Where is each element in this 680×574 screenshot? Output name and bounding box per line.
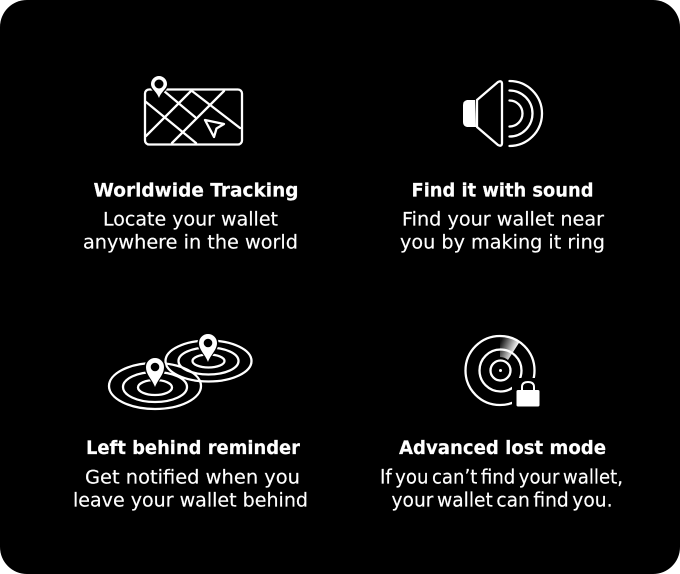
- text: anywhere in the world: anywhere in the world: [83, 232, 298, 254]
- icon: radar disc with padlock: [466, 336, 543, 410]
- text: If you can't find your wallet,: If you can’t find your wallet,: [380, 466, 623, 488]
- text: Find your wallet near: Find your wallet near: [402, 210, 604, 230]
- heading: Worldwide Tracking: Worldwide Tracking: [94, 180, 298, 202]
- icon: map with pin and arrow: [145, 74, 242, 144]
- text: leave your wallet behind: leave your wallet behind: [73, 490, 308, 512]
- heading: Find it with sound: Find it with sound: [412, 180, 594, 202]
- icon: speaker with sound waves: [463, 81, 542, 146]
- text: Get notified when you: Get notified when you: [85, 468, 300, 488]
- text: Locate your wallet: Locate your wallet: [103, 210, 278, 230]
- text: you by making it ring: you by making it ring: [400, 232, 605, 254]
- heading: Advanced lost mode: Advanced lost mode: [399, 437, 606, 459]
- heading: Left behind reminder: Left behind reminder: [86, 437, 301, 459]
- text: your wallet can find you.: your wallet can find you.: [392, 488, 612, 512]
- icon: overlapping location rings: [109, 332, 252, 409]
